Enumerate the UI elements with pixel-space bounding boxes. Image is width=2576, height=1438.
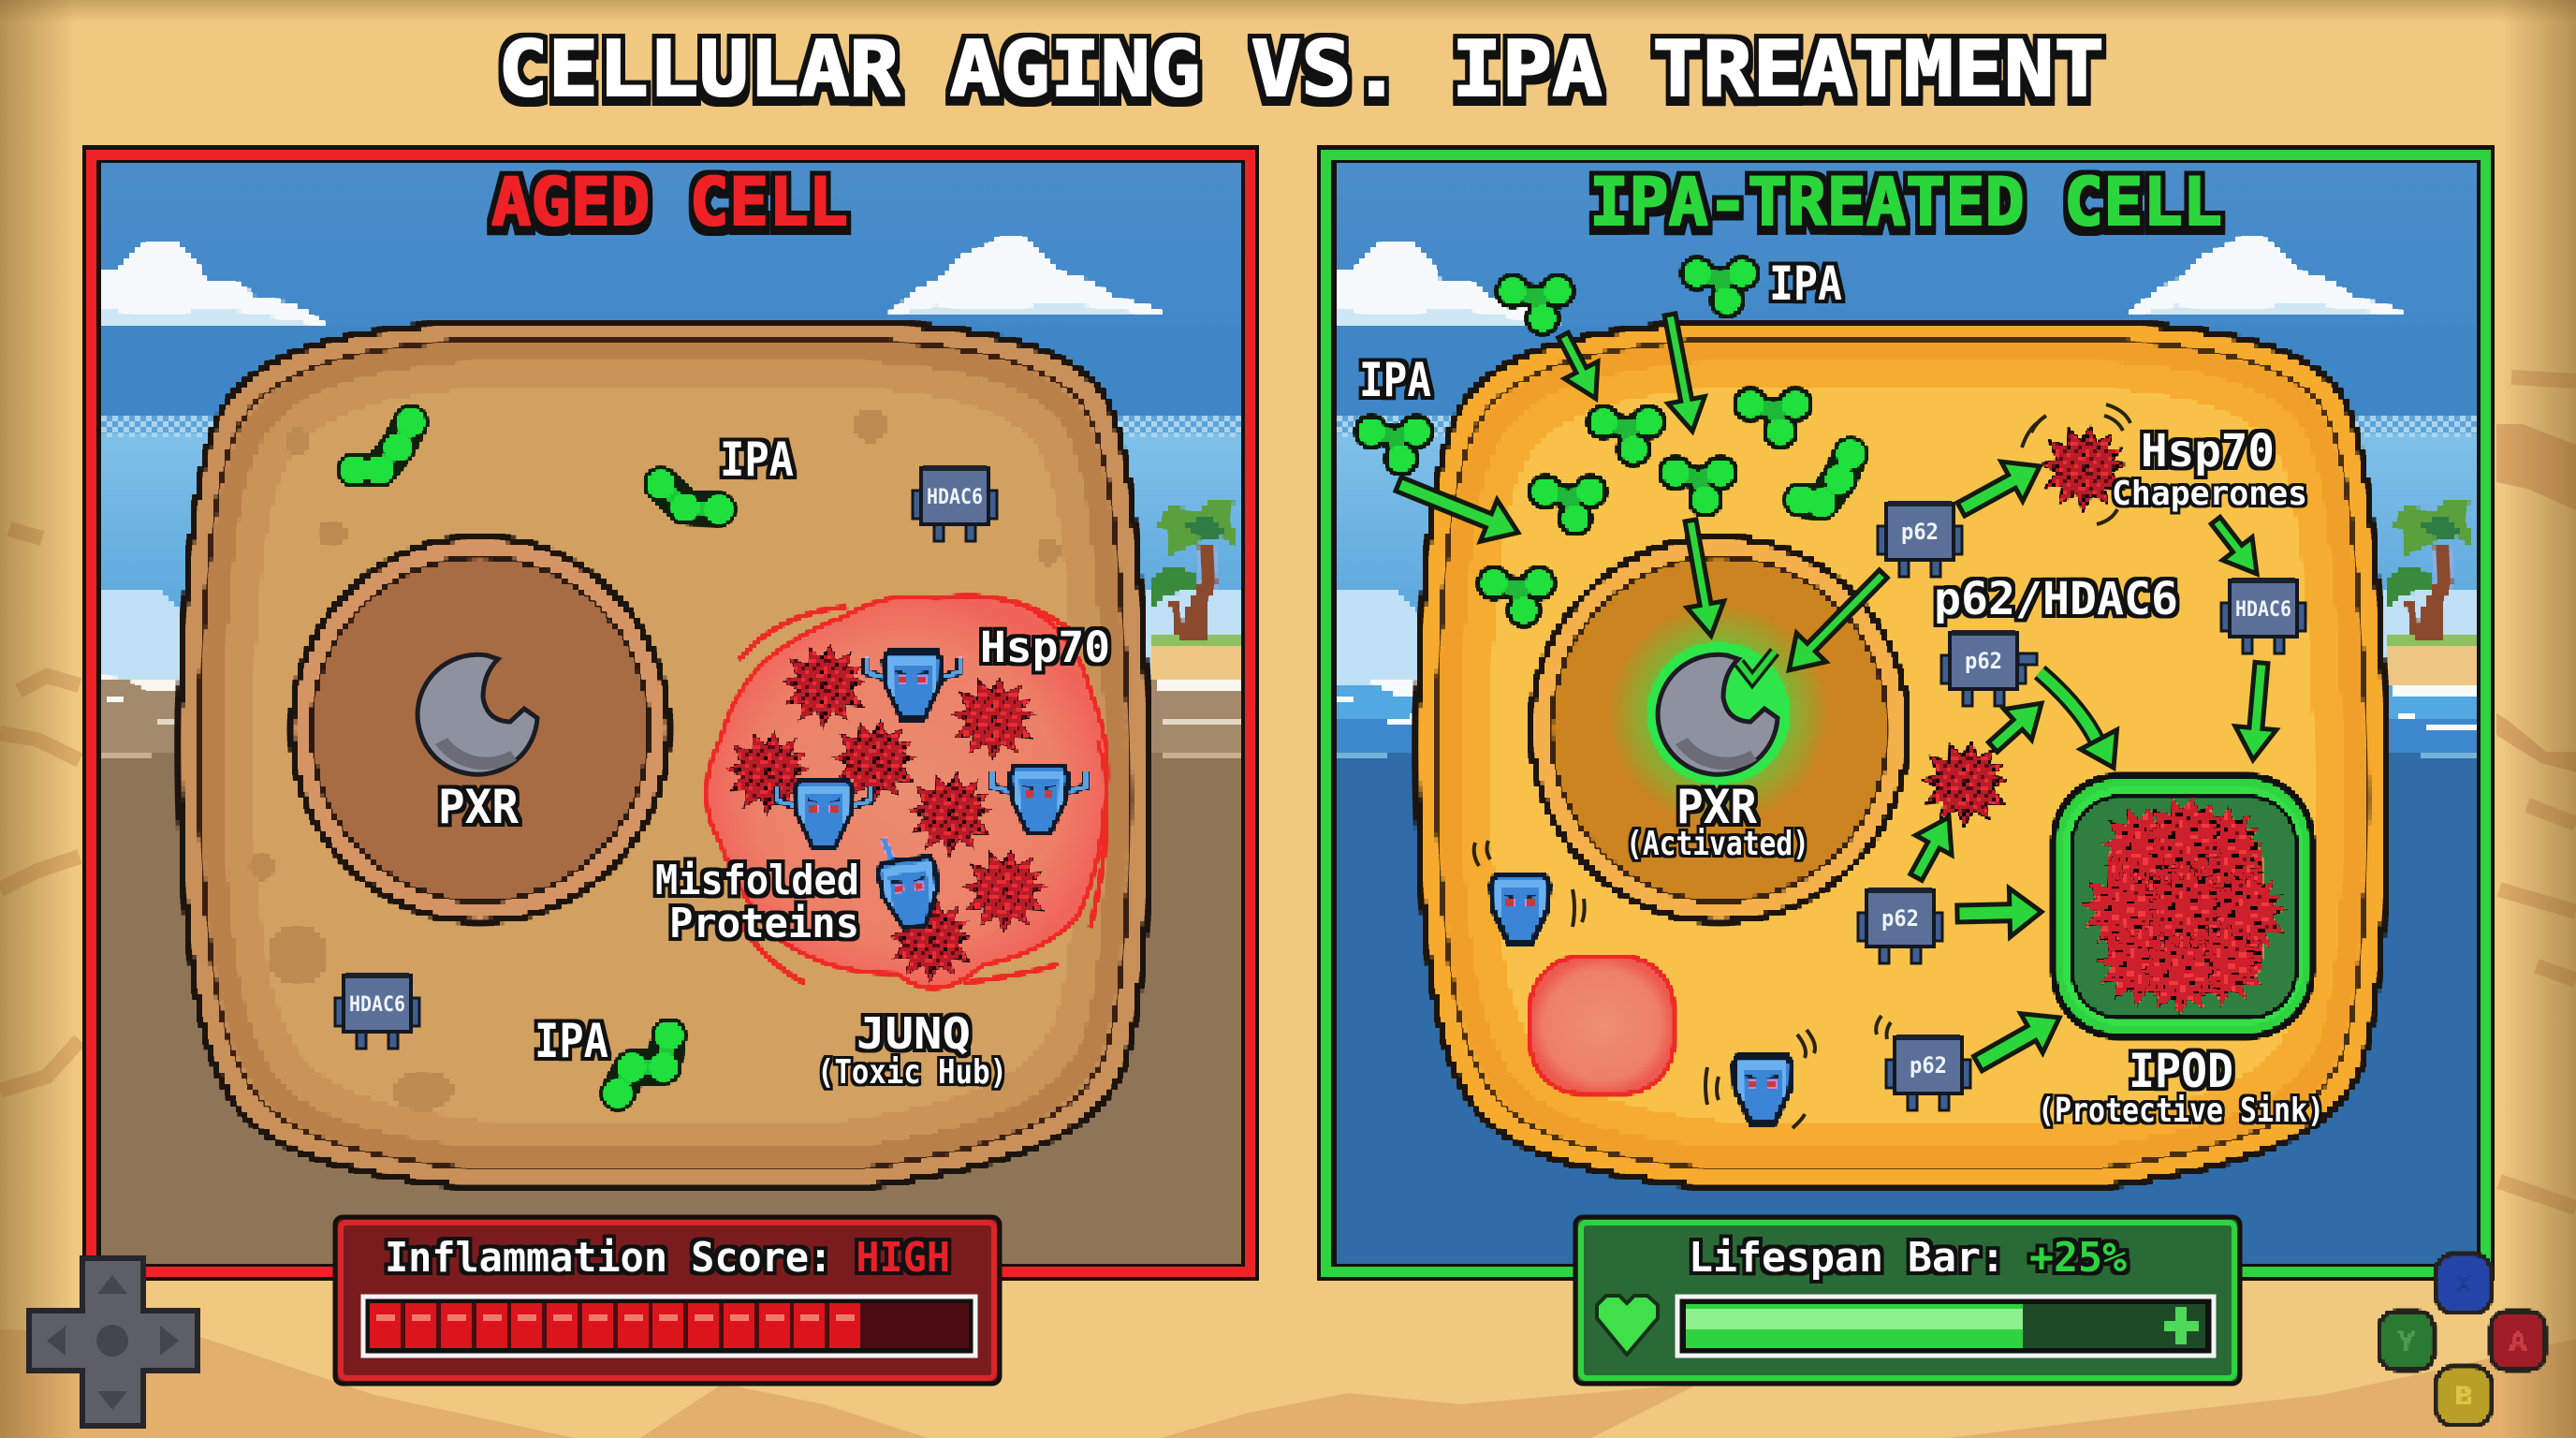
arrow: p62 to IPOD: [1956, 888, 2042, 938]
cell: treated: [1417, 322, 2387, 1186]
aggregated proteins: [2080, 795, 2288, 1017]
label: lifespan +25%: Lifespan Bar: +25%: [1689, 1234, 2127, 1282]
button Y: Y: [2398, 1328, 2415, 1359]
HDAC6 robot bottom: HDAC6: [349, 993, 405, 1017]
arrow: p62 to protein: [1898, 807, 1967, 888]
IPOD protective sink: [2054, 776, 2312, 1036]
nucleus: aged: [292, 537, 668, 921]
scene: sky and beach: [100, 165, 1240, 1263]
arrows: [1390, 311, 2282, 1083]
button B: [2437, 1367, 2491, 1425]
label: JUNQ: JUNQ: [856, 1008, 971, 1059]
button B: B: [2455, 1383, 2472, 1415]
label: Misfolded: Misfolded: [655, 857, 859, 904]
label: inflammation score high: Inflammation Score: HIGH: [385, 1234, 950, 1282]
p62 robot middle: p62: [1965, 648, 2002, 674]
arrow: lower p62 to IPOD: [1967, 998, 2071, 1083]
panel: lifespan bar: [1575, 1217, 2240, 1384]
IPA molecules: aged: [341, 408, 733, 1108]
label: PXR: PXR: [438, 780, 520, 834]
Hsp70 chaperones trapped: [777, 652, 1086, 931]
icon: PXR receptor: [417, 654, 537, 774]
panel frame: red: [82, 145, 1259, 1281]
heading: aged cell: AGED CELL: [491, 164, 848, 241]
button Y: [2379, 1312, 2434, 1370]
label: PXR activated: PXR: [1676, 780, 1758, 834]
p62 robot top: [1878, 501, 1962, 577]
label: Protective Sink: (Protective Sink): [2038, 1092, 2324, 1130]
panel: IPA-treated cell: [1317, 145, 2495, 1281]
p62 robot middle: [1941, 630, 2037, 706]
misfolded proteins: [724, 643, 1047, 985]
icon: plus: [2164, 1307, 2199, 1344]
arrow: IPA into cell 1: [1546, 327, 1613, 407]
icon: heart: [1597, 1296, 1658, 1355]
label: IPA bottom: IPA: [534, 1014, 608, 1068]
motion marks: [1474, 404, 2130, 1128]
p62 robot lower: p62: [1881, 905, 1919, 932]
icon: game buttons: [2379, 1255, 2545, 1425]
p62 robot lower: [1858, 888, 1942, 963]
button A: A: [2510, 1328, 2526, 1359]
arrow: Hsp70 to HDAC6: [2201, 509, 2272, 585]
meter segments: [370, 1303, 860, 1348]
button X: [2437, 1255, 2491, 1313]
icon: d-pad: [29, 1258, 198, 1426]
IPA molecules: treated: [1354, 256, 1865, 628]
p62 robot bottom: [1886, 1034, 1970, 1110]
heading: IPA-treated cell: IPA-TREATED CELL: [1589, 164, 2222, 241]
arrow: IPA into cell 2: [1651, 311, 1711, 434]
HDAC6 robot bottom: [335, 973, 419, 1049]
button X: X: [2455, 1270, 2472, 1302]
label: IPA left: IPA: [1359, 353, 1431, 407]
label: p62/HDAC6: p62/HDAC6: [1934, 573, 2178, 625]
label: Activated: (Activated): [1626, 825, 1809, 863]
icon: PXR activated: [1658, 654, 1778, 774]
label: Toxic Hub: (Toxic Hub): [817, 1053, 1007, 1092]
panel frame: green: [1317, 145, 2495, 1281]
p62 robot top: p62: [1901, 519, 1939, 545]
HDAC6 robot: HDAC6: [2235, 598, 2291, 622]
label: IPA top: IPA: [720, 433, 794, 487]
arrow: curved p62 to IPOD: [2040, 672, 2131, 777]
label: IPOD: IPOD: [2129, 1044, 2233, 1098]
arrow: p62 to PXR: [1775, 560, 1898, 684]
HDAC6 robot: [2221, 578, 2305, 653]
arrow: HDAC6 to IPOD: [2232, 661, 2282, 762]
arrow: protein to p62: [1979, 688, 2056, 762]
label: Chaperones: Chaperones: [2112, 475, 2307, 513]
chaperones and free proteins: [1491, 426, 2127, 1123]
arrow: IPA into cell 3: [1390, 463, 1527, 553]
label: Hsp70: Hsp70: [2141, 425, 2275, 477]
p62 robot bottom: p62: [1910, 1052, 1947, 1078]
salmon residual hub: [1530, 957, 1674, 1093]
label: IPA top: IPA: [1769, 257, 1842, 311]
scene: sky and sea: [1336, 165, 2477, 1263]
HDAC6 robot top: [913, 465, 997, 541]
title: CELLULAR AGING VS. IPA TREATMENT: [498, 25, 2104, 114]
cell: aged: [180, 322, 1149, 1186]
label: Hsp70: Hsp70: [980, 623, 1110, 672]
icon: check mark: [1739, 652, 1775, 680]
JUNQ toxic hub: [707, 596, 1107, 988]
arrow: IPA to PXR: [1672, 517, 1730, 639]
bar: inflammation meter: [361, 1295, 977, 1357]
activation glow: [1608, 603, 1829, 824]
nucleus: treated: [1531, 537, 1908, 921]
arrow: p62 to Hsp70: [1950, 447, 2051, 529]
button A: [2491, 1312, 2545, 1370]
label: Proteins: Proteins: [669, 900, 859, 947]
panel: inflammation score: [335, 1217, 1000, 1384]
bar: lifespan meter: [1676, 1295, 2216, 1357]
panel: aged cell: [82, 145, 1259, 1281]
HDAC6 robot top: HDAC6: [927, 486, 983, 509]
